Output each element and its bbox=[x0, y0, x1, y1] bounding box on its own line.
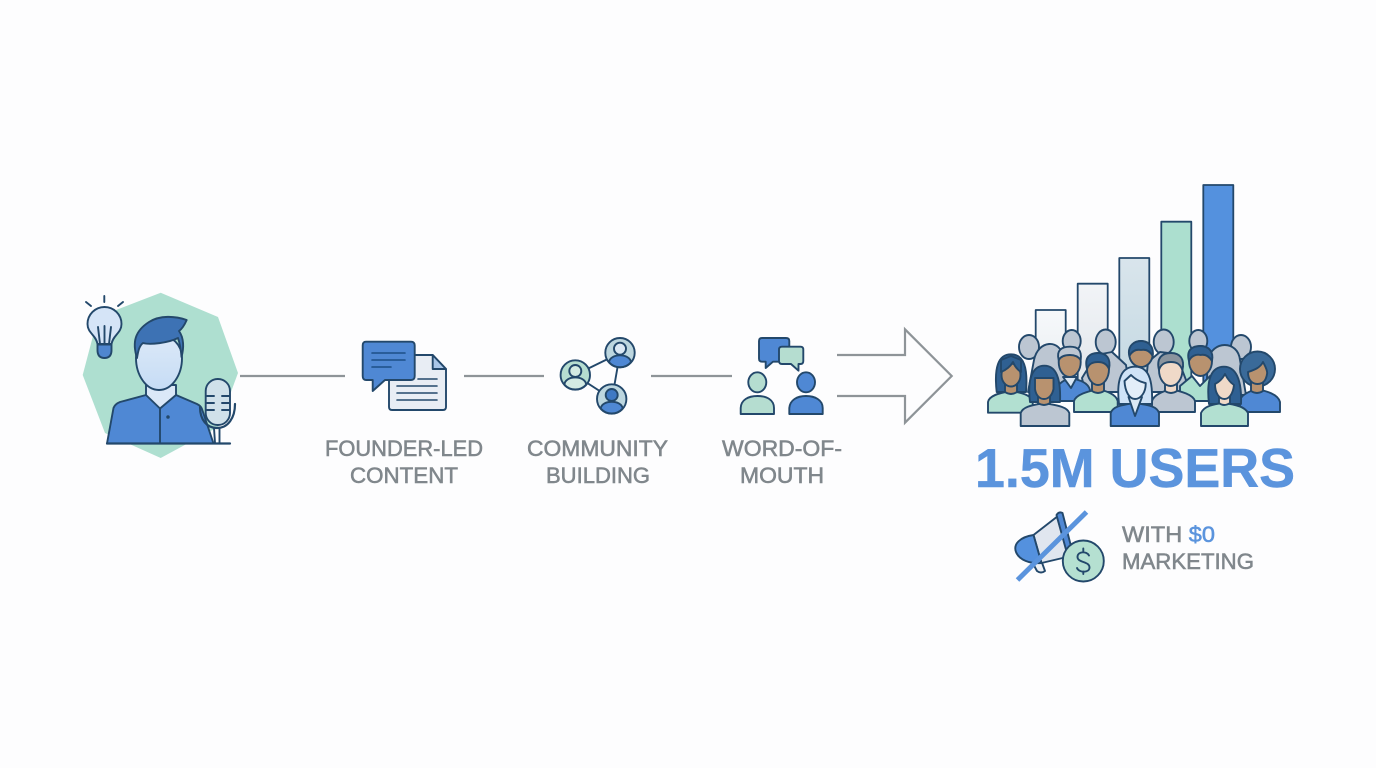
label: COMMUNITY bbox=[527, 436, 668, 461]
connector line bbox=[240, 375, 345, 377]
icon: network of people bbox=[561, 338, 635, 414]
step: community building: BUILDING bbox=[546, 463, 650, 488]
person: back centre right bbox=[1129, 341, 1153, 367]
caption: with $0 marketing: WITH $0 bbox=[1122, 522, 1215, 547]
person: front centre woman bbox=[1111, 367, 1159, 426]
person bbox=[107, 317, 230, 444]
person: grey hair back left bbox=[1057, 347, 1090, 401]
step: founder-led content bbox=[325, 342, 483, 488]
icon: founder with lightbulb and microphone bbox=[83, 293, 238, 458]
icon: microphone bbox=[200, 379, 235, 443]
cross-out stroke bbox=[1018, 512, 1086, 580]
person: front right woman bbox=[1201, 367, 1248, 426]
icon: lightbulb bbox=[86, 296, 123, 358]
connector line bbox=[464, 375, 544, 377]
label: WORD-OF- bbox=[722, 436, 842, 461]
crowd of users bbox=[988, 330, 1280, 426]
icon: crossed-out megaphone and dollar coin bbox=[1015, 512, 1104, 582]
connector line bbox=[651, 375, 732, 377]
person: grey hair man right bbox=[1152, 353, 1195, 412]
step: word of mouth bbox=[722, 338, 842, 488]
icon: document bbox=[389, 355, 446, 410]
headline stat: 1.5M USERS bbox=[975, 437, 1295, 499]
megaphone bbox=[1015, 512, 1073, 572]
caption: with $0 marketing bbox=[1122, 522, 1254, 574]
person: woman far right bbox=[1240, 352, 1280, 412]
arrow bbox=[837, 329, 952, 423]
back row silhouettes bbox=[1019, 330, 1251, 395]
coin bbox=[1063, 540, 1104, 582]
step: founder-led content: CONTENT bbox=[350, 463, 458, 488]
step: community building bbox=[527, 338, 668, 488]
bar chart: growth bbox=[1036, 185, 1233, 400]
green polygon backdrop bbox=[83, 293, 238, 458]
icon: speech bubble bbox=[363, 342, 415, 391]
label: FOUNDER-LED bbox=[325, 436, 483, 461]
caption: with $0 marketing: MARKETING bbox=[1122, 549, 1254, 574]
person: back right bbox=[1180, 346, 1220, 401]
step: word of mouth: MOUTH bbox=[740, 463, 824, 488]
person: woman far left bbox=[988, 354, 1033, 413]
person: man left centre bbox=[1074, 353, 1118, 412]
person: front left bbox=[1021, 366, 1069, 426]
icon: two people talking bbox=[741, 338, 823, 414]
